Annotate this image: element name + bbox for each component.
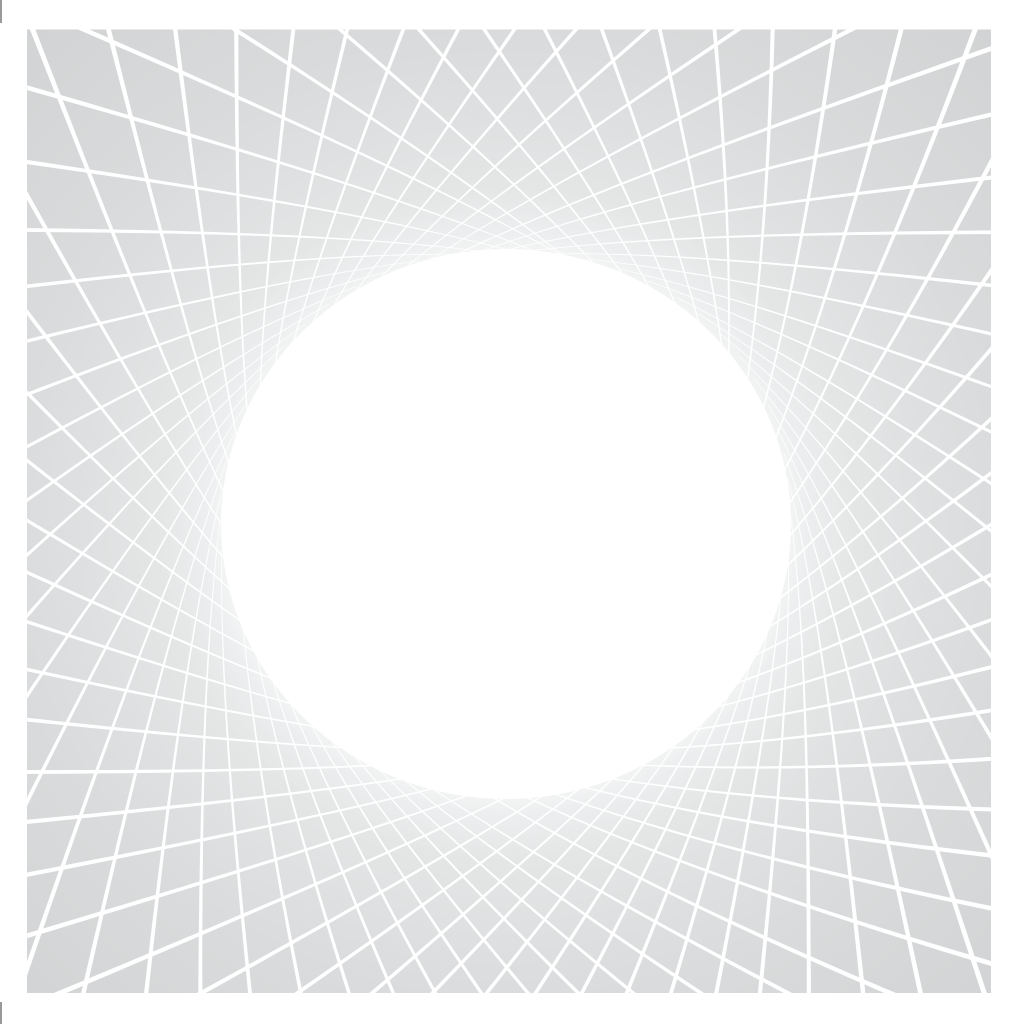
crop mark: bottom left (0, 1002, 2, 1024)
crop mark: top left (0, 0, 2, 23)
central white circle (221, 249, 791, 799)
